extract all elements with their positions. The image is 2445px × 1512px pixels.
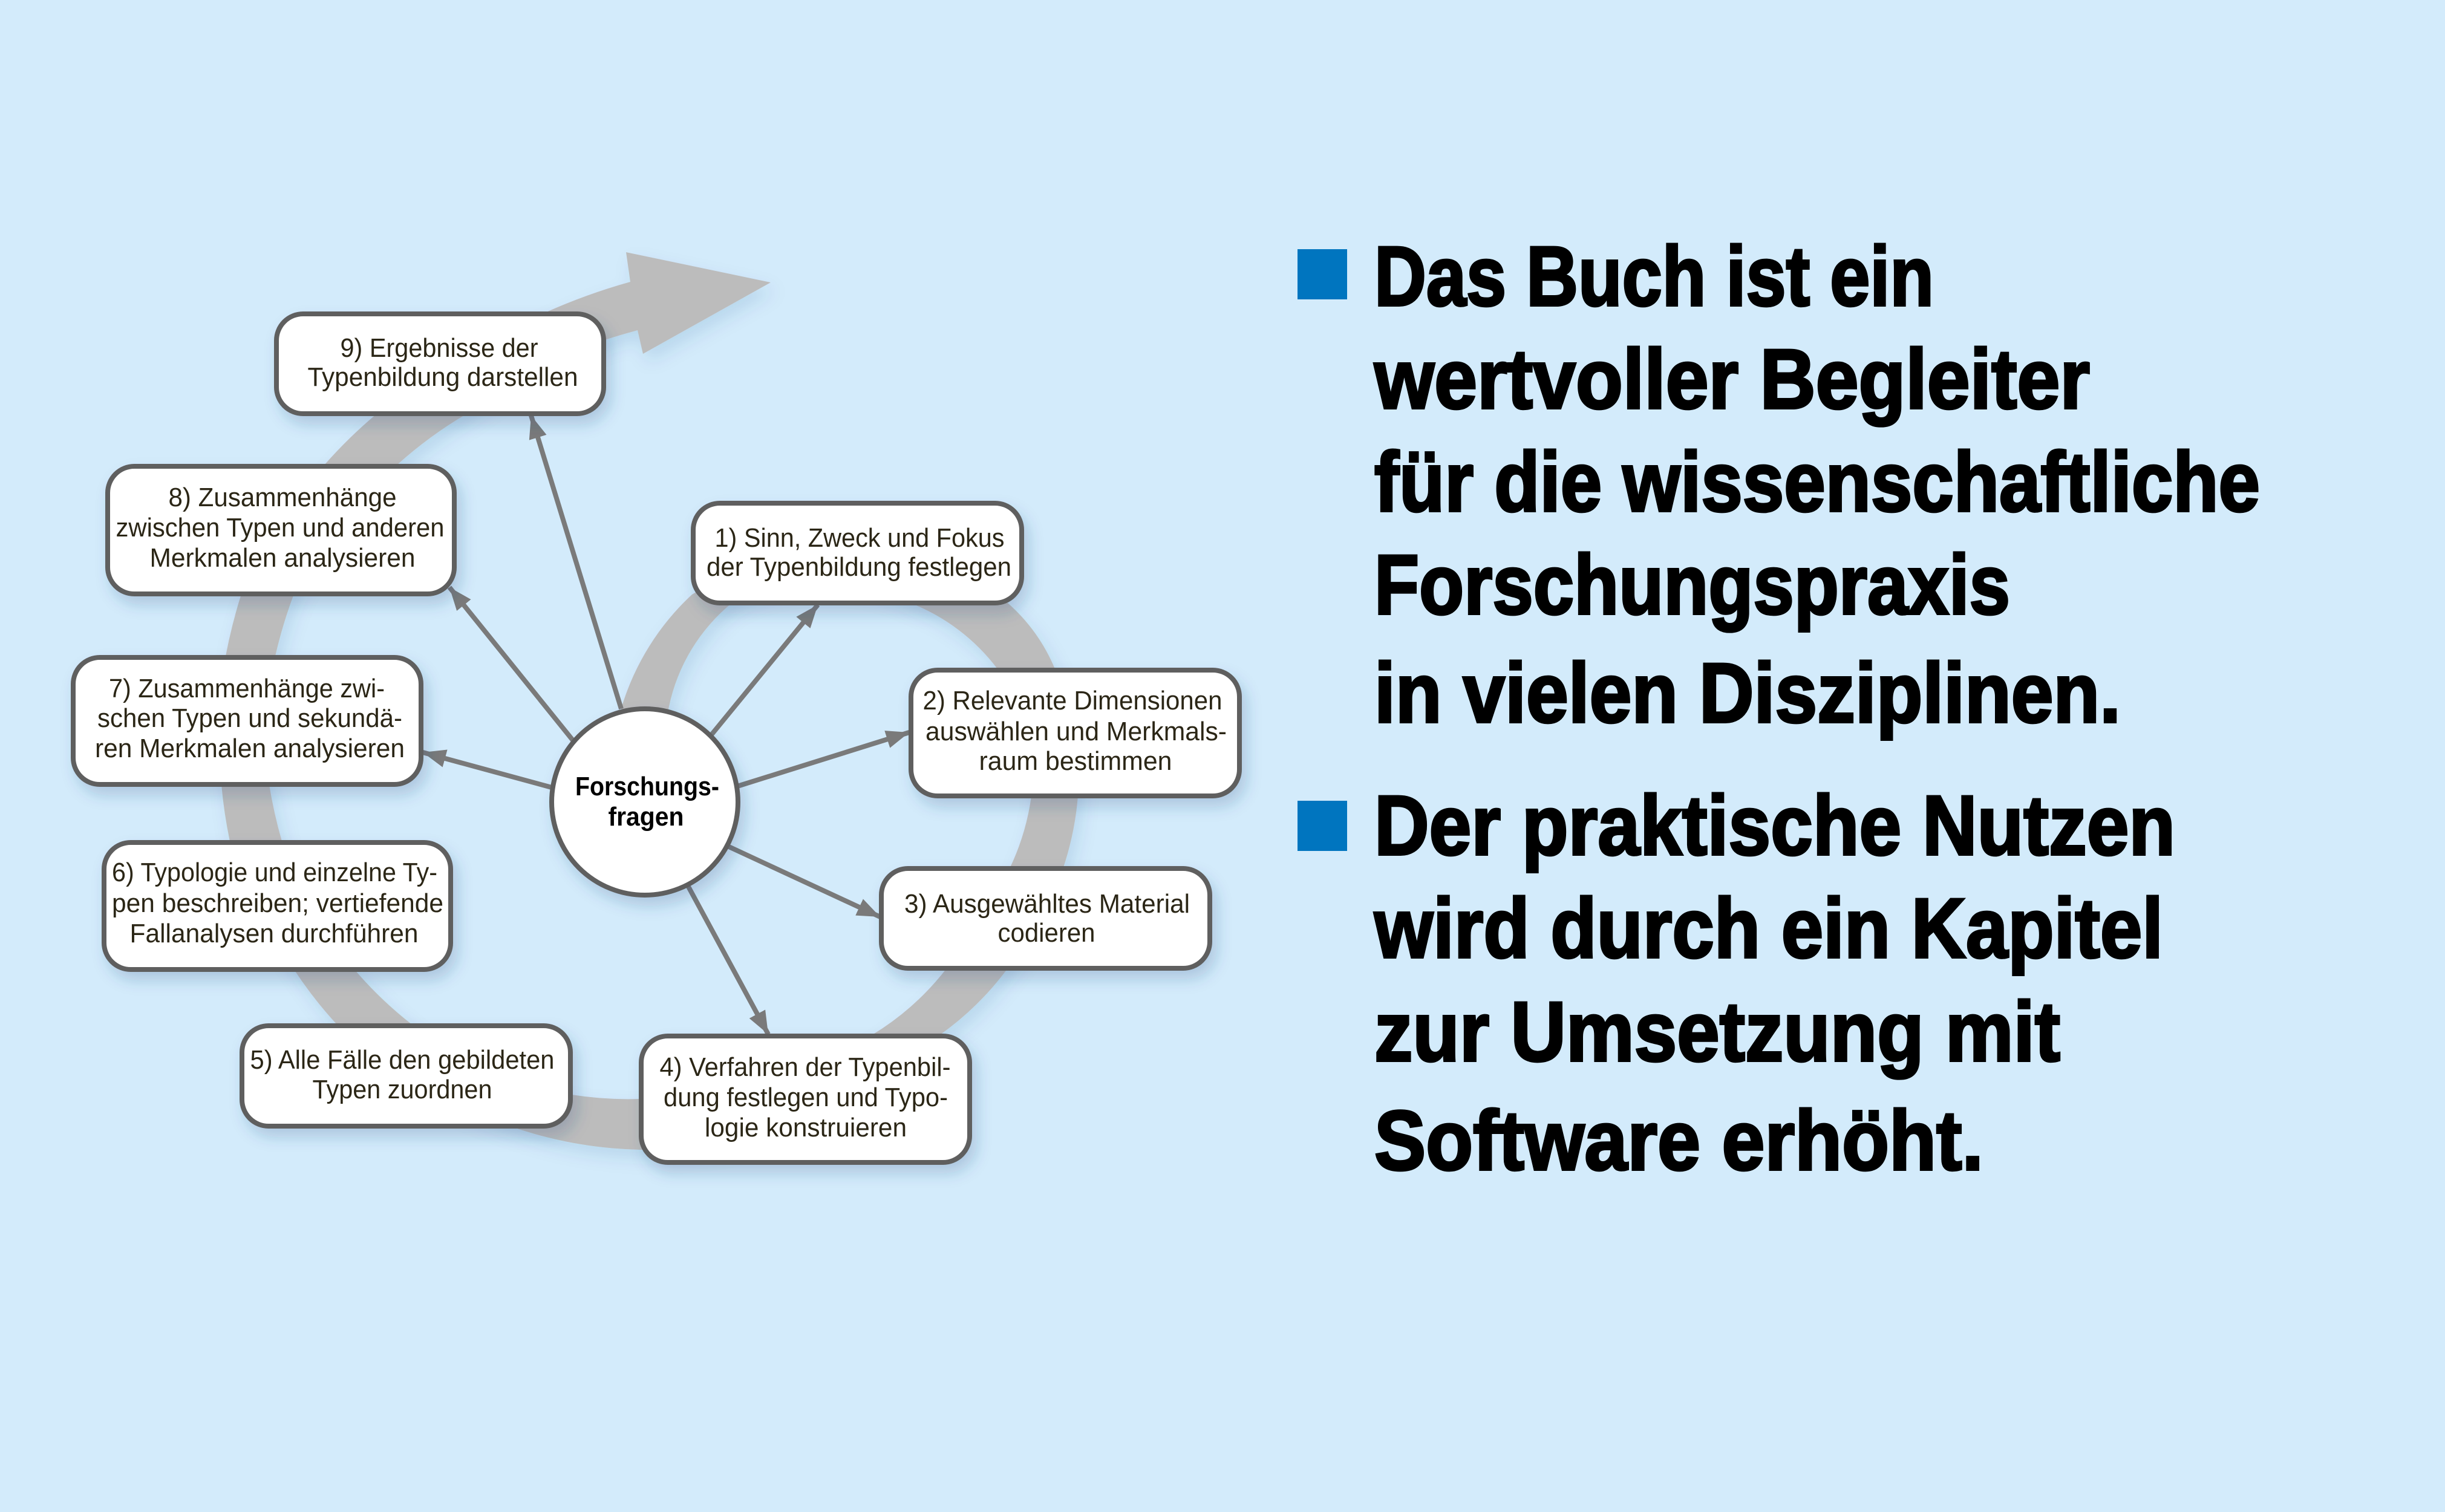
step 4 box: dung festlegen und Typo- [664, 1083, 948, 1112]
arrow: to step 8 [449, 587, 573, 740]
step 8 box: zwischen Typen und anderen [116, 513, 444, 543]
arrow: to step 4 [688, 887, 768, 1034]
step 6 box: 6) Typologie und einzelne Ty- [112, 858, 437, 887]
step 1 box [693, 503, 1022, 603]
text block: first statement: Forschungspraxis [1374, 537, 2010, 632]
step 1 box: 1) Sinn, Zweck und Fokus [715, 523, 1004, 553]
step 5 box: 5) Alle Fälle den gebildeten [250, 1045, 554, 1075]
step 2 box: raum bestimmen [979, 746, 1172, 776]
central circle: Forschungsfragen: Forschungs- [575, 772, 719, 801]
spiral arrow [220, 252, 1079, 1150]
step 2 box: 2) Relevante Dimensionen [923, 686, 1222, 715]
central circle: Forschungsfragen [552, 709, 738, 895]
step 7 box [73, 657, 421, 784]
text block: first statement: wertvoller Begleiter [1374, 331, 2090, 426]
step 9 box: 9) Ergebnisse der [340, 333, 538, 363]
step 8 box: Merkmalen analysieren [150, 543, 415, 573]
step 9 box [276, 314, 604, 414]
step 4 box: 4) Verfahren der Typenbil- [659, 1052, 951, 1082]
arrow: to step 1 [711, 605, 818, 735]
step 7 box: 7) Zusammenhänge zwi- [109, 674, 385, 703]
arrow: to step 2 [737, 732, 909, 786]
text block: first statement [1374, 229, 2260, 740]
step 3 box: codieren [998, 918, 1095, 948]
text block: second statement: wird durch ein Kapitel [1374, 881, 2163, 976]
step 9 box: Typenbildung darstellen [307, 362, 578, 392]
arrow: to step 3 [729, 847, 880, 917]
arrow: to step 7 [423, 752, 552, 787]
step 8 box [108, 466, 454, 594]
step 4 box [641, 1036, 970, 1162]
step 2 box [911, 670, 1239, 796]
step 3 box [881, 868, 1210, 968]
diagram: spiral process around research questions [73, 252, 1239, 1162]
step 5 box: Typen zuordnen [312, 1075, 492, 1104]
step 6 box: pen beschreiben; vertiefende [112, 888, 443, 918]
step 5 box [242, 1026, 570, 1126]
central circle: Forschungsfragen: fragen [609, 802, 684, 832]
text block: first statement: Das Buch ist ein [1374, 229, 1934, 324]
text block: second statement: Software erhöht. [1374, 1093, 1983, 1188]
step 6 box: Fallanalysen durchführen [129, 919, 419, 948]
step 6 box [104, 842, 451, 969]
text block: second statement [1374, 778, 2175, 1188]
text block: first statement: in vielen Disziplinen. [1374, 645, 2121, 740]
step 1 box: der Typenbildung festlegen [707, 552, 1011, 582]
step 4 box: logie konstruieren [705, 1113, 907, 1142]
step 2 box: auswählen und Merkmals- [925, 717, 1227, 746]
text block: first statement: für die wissenschaftliche [1374, 434, 2260, 529]
bullet square 2 [1298, 801, 1347, 851]
step 3 box: 3) Ausgewähltes Material [904, 889, 1190, 919]
arrow: to step 9 [531, 415, 621, 709]
step 8 box: 8) Zusammenhänge [168, 483, 397, 512]
step 7 box: ren Merkmalen analysieren [95, 734, 405, 763]
text block: second statement: Der praktische Nutzen [1374, 778, 2175, 873]
text block: second statement: zur Umsetzung mit [1374, 984, 2060, 1079]
step 7 box: schen Typen und sekundä- [97, 703, 402, 733]
bullet square 1 [1298, 249, 1347, 299]
